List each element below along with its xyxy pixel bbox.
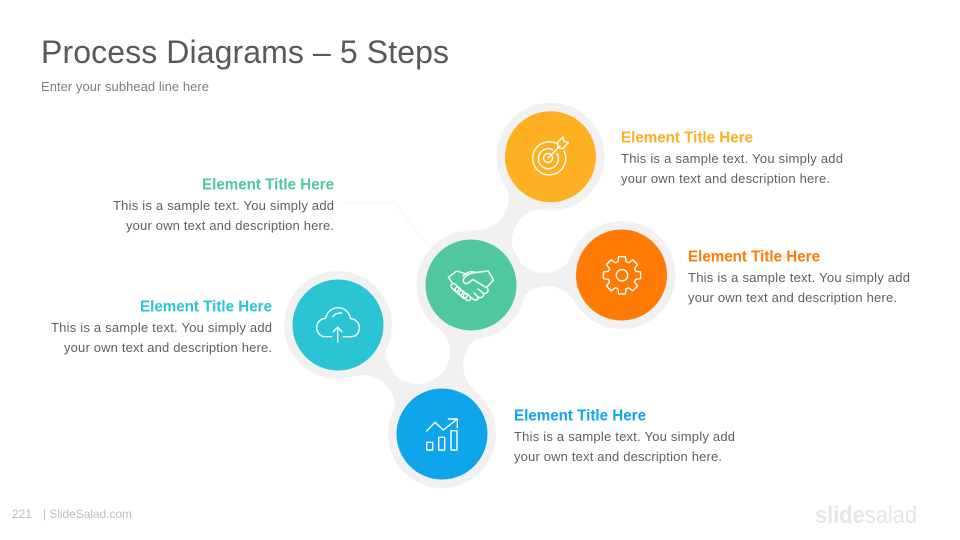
icon: handshake bbox=[448, 271, 494, 302]
text block: green step: your own text and description here. bbox=[126, 218, 334, 233]
footer: page number and site: | SlideSalad.com bbox=[43, 507, 132, 521]
footer: page number and site: 221 bbox=[12, 507, 32, 521]
text block: green step: Element Title Here bbox=[202, 176, 334, 194]
text block: green step bbox=[113, 176, 334, 233]
subhead: Enter your subhead line here bbox=[41, 79, 209, 94]
logo wordmark: slidesalad bbox=[815, 502, 917, 529]
text block: teal step: your own text and description here. bbox=[64, 340, 272, 355]
leader line from green step to its text bbox=[342, 203, 427, 244]
icon: gear bbox=[603, 257, 641, 294]
process diagram bbox=[284, 103, 676, 488]
text block: teal step: Element Title Here bbox=[140, 298, 272, 316]
text block: blue step: Element Title Here bbox=[514, 408, 646, 424]
step: handshake (green) bbox=[426, 240, 516, 330]
step: gear (orange) bbox=[576, 230, 667, 320]
connector background bbox=[284, 103, 676, 488]
text block: yellow step: This is a sample text. You simply add bbox=[621, 151, 843, 166]
text block: orange step: your own text and description here. bbox=[688, 290, 897, 305]
icon: cloud upload bbox=[317, 308, 359, 342]
text block: yellow step: Element Title Here bbox=[621, 130, 753, 146]
text block: teal step bbox=[51, 298, 272, 355]
step: cloud upload (teal) bbox=[292, 280, 384, 370]
step: target (yellow) bbox=[505, 111, 596, 202]
text block: blue step bbox=[514, 408, 735, 464]
step: growth chart (blue) bbox=[396, 388, 488, 480]
text block: orange step: This is a sample text. You simply add bbox=[688, 270, 910, 285]
text block: orange step: Element Title Here bbox=[688, 248, 820, 266]
text block: orange step bbox=[688, 248, 910, 305]
text block: teal step: This is a sample text. You simply add bbox=[51, 320, 272, 335]
icon: target bbox=[533, 137, 568, 175]
text block: yellow step bbox=[621, 130, 843, 186]
title: Process Diagrams – 5 Steps bbox=[41, 34, 449, 70]
text block: blue step: This is a sample text. You simply add bbox=[514, 429, 735, 444]
text block: yellow step: your own text and description here. bbox=[621, 171, 830, 186]
text block: green step: This is a sample text. You simply add bbox=[113, 198, 334, 213]
text block: blue step: your own text and description here. bbox=[514, 449, 722, 464]
icon: bar chart with rising arrow bbox=[427, 419, 457, 450]
